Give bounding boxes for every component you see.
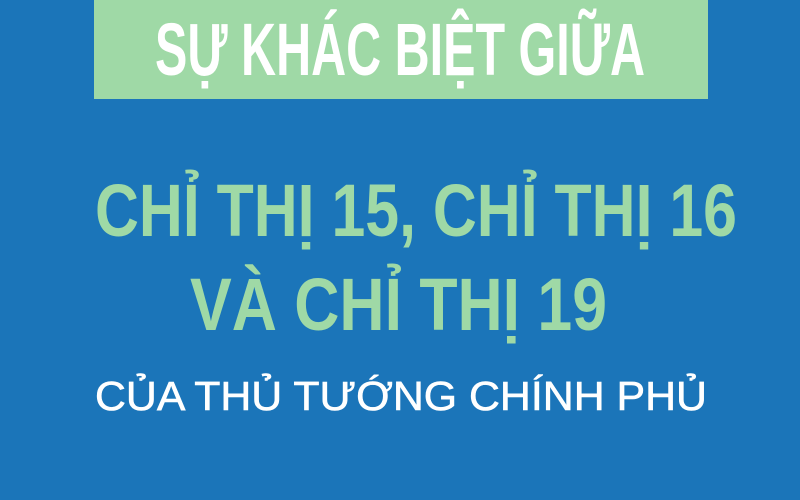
header banner bbox=[94, 0, 708, 99]
title line 2: VÀ CHỈ THỊ 19 bbox=[190, 263, 607, 346]
subtitle: CỦA THỦ TƯỚNG CHÍNH PHỦ bbox=[95, 373, 707, 419]
